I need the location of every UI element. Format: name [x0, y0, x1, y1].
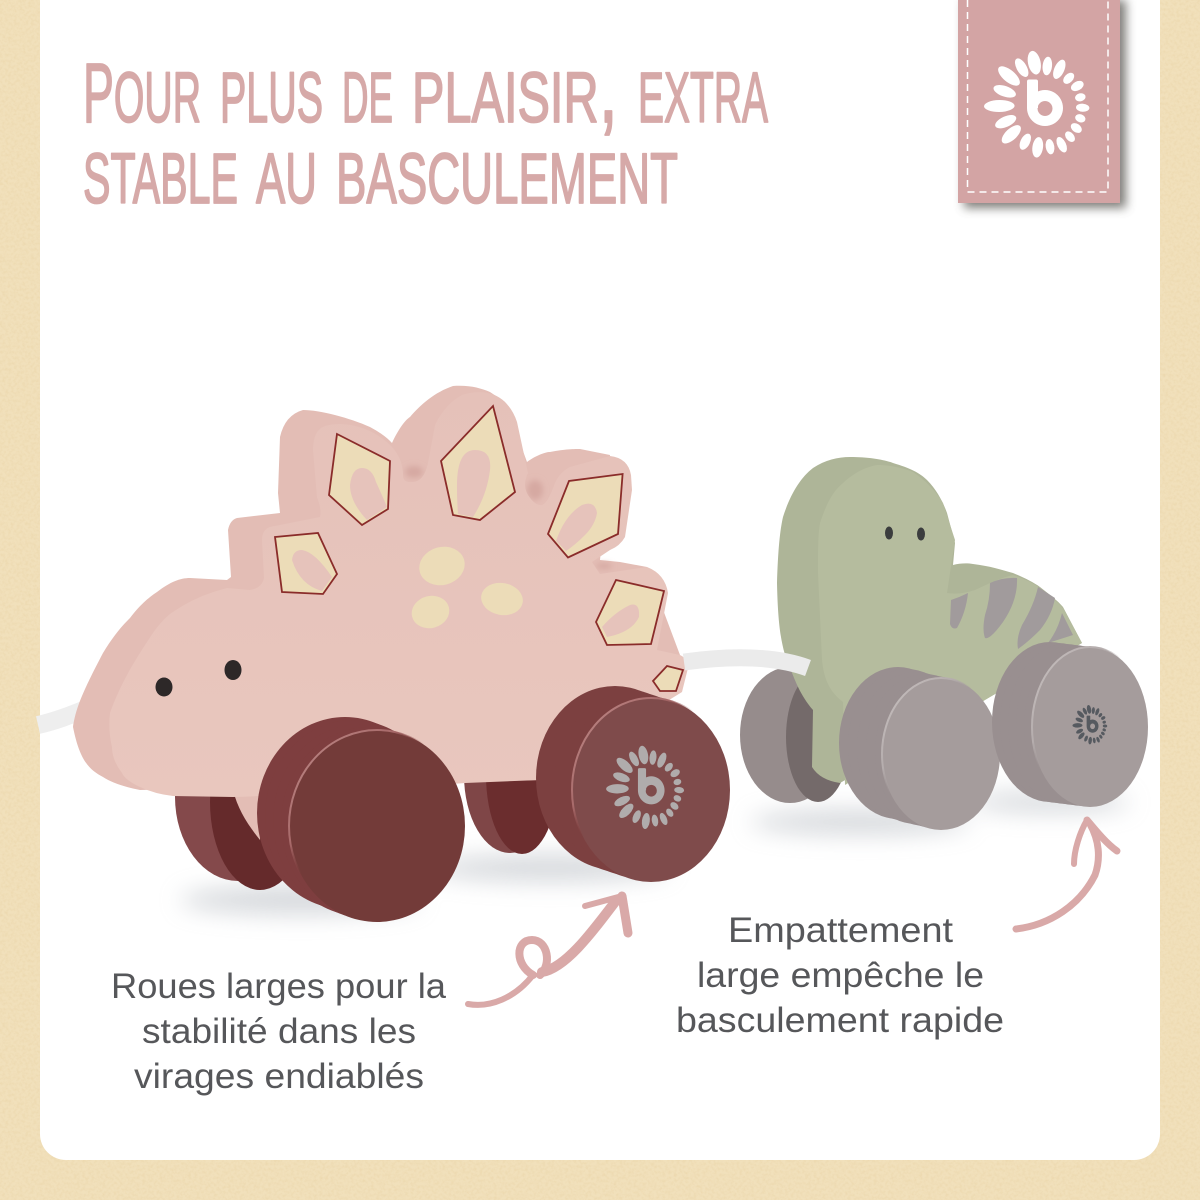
caption: wide wheels: stabilité dans les [142, 1012, 416, 1051]
body front [109, 392, 688, 797]
eyes [885, 526, 925, 540]
eyes [156, 660, 242, 696]
stripes [950, 578, 1073, 649]
caption: wheelbase: Empattement [728, 911, 953, 950]
notch shading [405, 466, 612, 569]
spine plate 5 [596, 580, 664, 645]
pull string between toys [684, 658, 808, 668]
ground shadow: pink toy [180, 855, 670, 914]
back left wheel [175, 713, 310, 890]
middle wheel [839, 667, 1000, 830]
spine plate 1 [275, 533, 337, 594]
right wheel [992, 642, 1148, 807]
title: plus [220, 30, 323, 144]
spine plate 2 [329, 434, 390, 525]
spine plate 4 [548, 474, 623, 558]
title: stable [83, 111, 238, 225]
arrow: to green wheel [1016, 820, 1117, 929]
wheel logo [606, 745, 684, 830]
spine plate 6 [653, 666, 683, 691]
pink stegosaurus toy [38, 386, 730, 922]
body side [777, 457, 1082, 783]
belly leg [233, 790, 262, 840]
caption: wheelbase: basculement rapide [676, 1001, 1004, 1040]
body side [73, 386, 680, 790]
body dots [408, 542, 525, 632]
title: extra [638, 30, 768, 144]
wheel logo [1072, 705, 1107, 745]
caption: wide wheels [111, 967, 447, 1096]
caption: wide wheels: Roues larges pour la [111, 967, 447, 1006]
title: basculement [336, 111, 678, 225]
title: de [342, 30, 393, 144]
caption: wide wheels: virages endiablés [134, 1057, 424, 1096]
arrow: to pink wheel [468, 896, 628, 1005]
ground shadow: green toy [750, 792, 1130, 834]
title: plaisir, [412, 30, 618, 144]
left pull string [38, 705, 96, 725]
title: Pour [83, 30, 201, 144]
caption: wheelbase [676, 911, 1004, 1040]
title [83, 30, 768, 225]
brand tag [958, 0, 1126, 208]
front left wheel [257, 717, 465, 922]
spine plate 3 [441, 406, 515, 520]
green dinosaur toy [684, 457, 1148, 834]
title: au [256, 111, 317, 225]
back right wheel [464, 696, 558, 854]
front right wheel [536, 686, 730, 882]
back wheel [740, 667, 850, 803]
caption: wheelbase: large empêche le [697, 956, 984, 995]
body front [818, 465, 1082, 785]
